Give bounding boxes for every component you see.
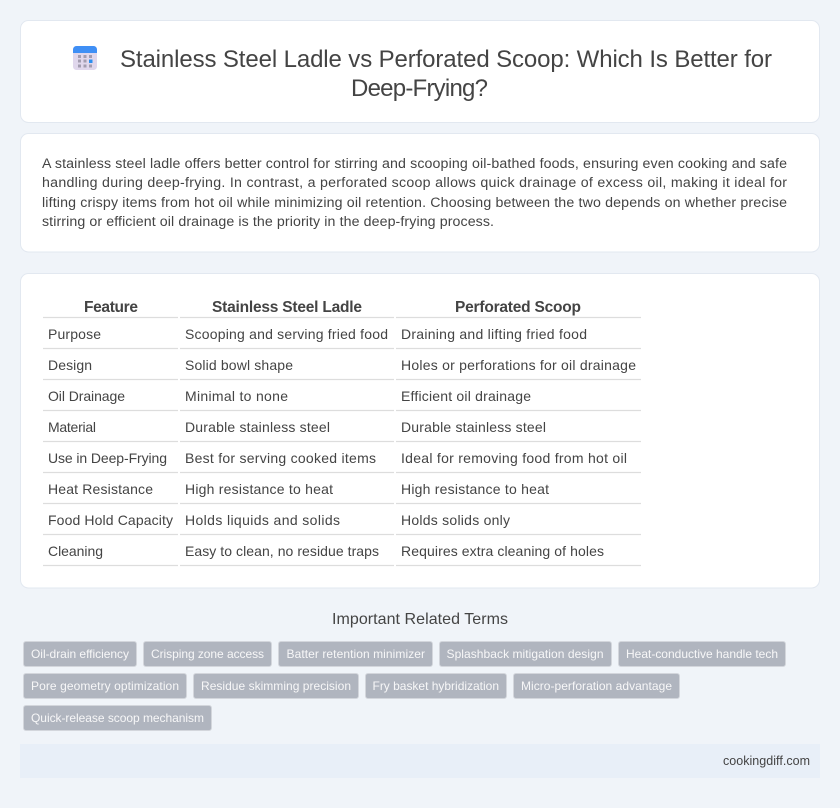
title: Stainless Steel Ladle vs Perforated Scoop: Which Is Better for [120, 46, 772, 73]
tag [278, 642, 432, 666]
table row: Heat Resistance [43, 481, 641, 504]
tag: Oil-drain efficiency [31, 647, 129, 661]
tag [366, 674, 506, 698]
tag [24, 706, 212, 730]
table row: Use in Deep-Frying: Best for serving cooked items [185, 450, 376, 466]
table row: Cleaning: Easy to clean, no residue traps [185, 543, 379, 559]
tag: Pore geometry optimization [31, 679, 179, 693]
table row: Use in Deep-Frying [43, 450, 641, 472]
panel: title header [20, 20, 820, 122]
tag: Splashback mitigation design [446, 647, 604, 661]
title [120, 46, 772, 102]
text block: summary paragraph [42, 156, 787, 230]
table row: Use in Deep-Frying: Use in Deep-Frying [48, 450, 167, 466]
table row: Material: Durable stainless steel [185, 419, 330, 435]
table row: Food Hold Capacity [43, 512, 641, 534]
table row: Oil Drainage: Oil Drainage [48, 388, 125, 404]
table row: Material: Durable stainless steel [401, 419, 546, 435]
table row: Purpose: Purpose [48, 326, 101, 342]
tag: Heat-conductive handle tech [626, 647, 778, 661]
tag [514, 674, 680, 698]
table row: Heat Resistance: High resistance to heat [401, 481, 549, 497]
tag [24, 642, 136, 666]
text block: summary paragraph: stirring or efficient oil drainage is the priority in the deep-frying process. [42, 214, 494, 230]
title: Deep-Frying? [351, 75, 488, 102]
table row: Cleaning: Cleaning [48, 543, 103, 559]
table row: Purpose [43, 326, 641, 348]
tag [440, 642, 612, 666]
table header row [43, 299, 641, 318]
text block: summary paragraph: handling during deep-frying. In contrast, a perforated scoop allows quick drainage of excess oil, making it ideal for [42, 175, 787, 191]
tag: Quick-release scoop mechanism [31, 711, 204, 725]
tag [194, 674, 358, 698]
table row: Oil Drainage: Minimal to none [185, 388, 288, 404]
table row: Purpose: Draining and lifting fried food [401, 326, 587, 342]
tag: Crisping zone access [151, 647, 264, 661]
table row: Purpose: Scooping and serving fried food [185, 326, 388, 342]
tag list: related terms [24, 642, 786, 730]
table row: Material [43, 419, 641, 442]
table row: Heat Resistance: High resistance to heat [185, 481, 333, 497]
table header row: Stainless Steel Ladle [212, 299, 362, 316]
icon: calendar grid [73, 46, 97, 70]
table header row: Feature [84, 299, 138, 316]
footer bar [20, 744, 820, 778]
text block: summary paragraph: lifting crispy items from hot oil while minimizing oil retention. Choosing between the two depends on whether precise [42, 195, 787, 211]
table row: Use in Deep-Frying: Ideal for removing food from hot oil [401, 450, 627, 466]
table row: Food Hold Capacity: Food Hold Capacity [48, 512, 173, 528]
table row: Oil Drainage [43, 388, 641, 410]
panel: comparison table [20, 274, 820, 588]
footer source text: cookingdiff.com [723, 754, 810, 768]
tag: Micro-perforation advantage [521, 679, 672, 693]
table row: Cleaning [43, 543, 641, 566]
tag: Residue skimming precision [201, 679, 351, 693]
tag: Fry basket hybridization [372, 679, 499, 693]
table row: Design: Design [48, 357, 92, 373]
text block: summary paragraph: A stainless steel ladle offers better control for stirring and scooping oil-bathed foods, ensuring even cooking and safe [42, 156, 787, 172]
heading: Important Related Terms: Important Related Terms [332, 611, 508, 628]
table row: Design [43, 357, 641, 380]
table row: Food Hold Capacity: Holds solids only [401, 512, 510, 528]
tag [618, 642, 786, 666]
tag [144, 642, 272, 666]
table row: Cleaning: Requires extra cleaning of holes [401, 543, 604, 559]
table row: Oil Drainage: Efficient oil drainage [401, 388, 531, 404]
table header row: Perforated Scoop [455, 299, 581, 316]
table row: Heat Resistance: Heat Resistance [48, 481, 153, 497]
table row: Food Hold Capacity: Holds liquids and solids [185, 512, 340, 528]
table row: Design: Holes or perforations for oil drainage [401, 357, 636, 373]
tag: Batter retention minimizer [286, 647, 425, 661]
panel: summary text [20, 134, 820, 252]
tag [24, 674, 186, 698]
table row: Material: Material [48, 419, 96, 435]
table row: Design: Solid bowl shape [185, 357, 293, 373]
